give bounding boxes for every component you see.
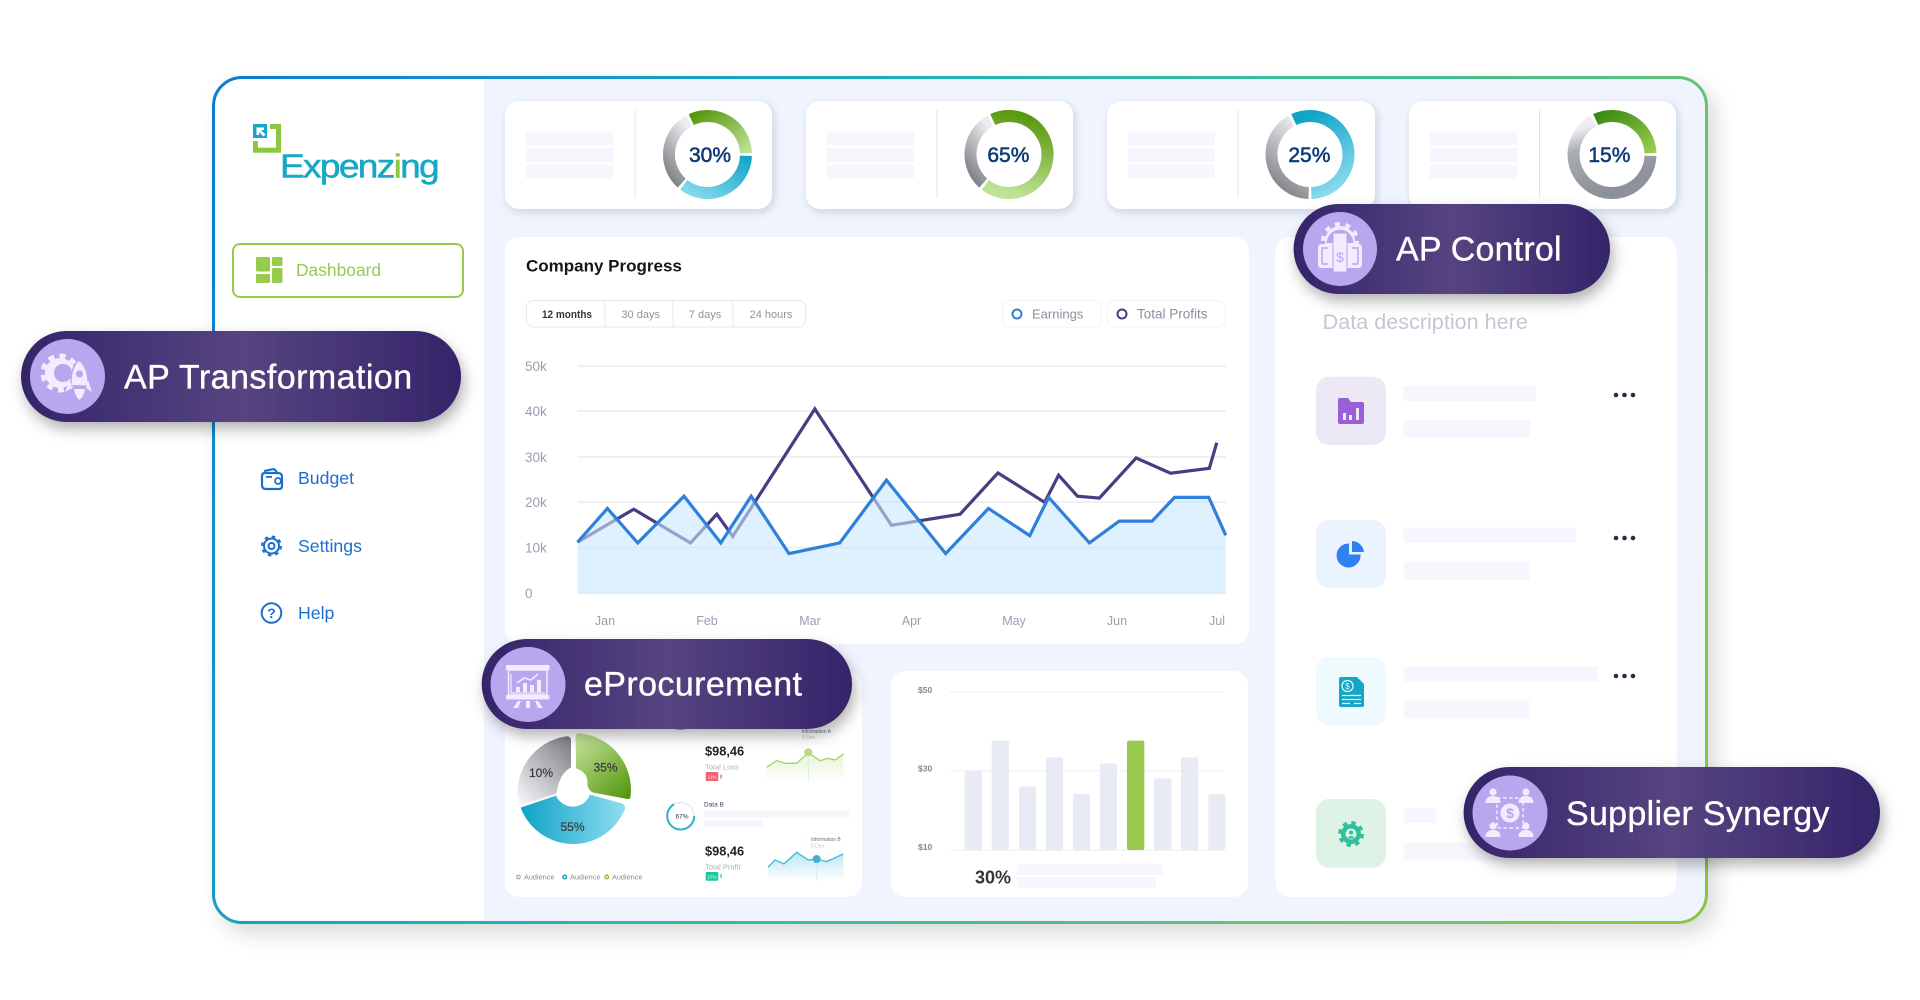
pill: Supplier Synergy: [1464, 767, 1880, 858]
x axis labels: Mar: [799, 614, 821, 628]
x axis labels: [595, 614, 1225, 628]
row 3: [1316, 657, 1635, 726]
icon: gear with user: [1340, 823, 1362, 845]
stat card: 15%: 15%: [1588, 144, 1630, 167]
legend: Total Profits: [1108, 300, 1225, 327]
icon: gear with money: [1318, 224, 1362, 272]
y axis labels: 10k: [525, 540, 547, 556]
nav item: Budget: [262, 468, 354, 489]
row 1: [1316, 377, 1635, 445]
y axis labels: $30: [918, 764, 932, 774]
metric: Total Loss: $98,46: [705, 744, 744, 758]
panel: audience pie and finance data: [505, 671, 862, 897]
heading: Company Progress: Company Progress: [526, 256, 682, 276]
sparkline: Information A: [767, 727, 843, 782]
y axis labels: 50k: [525, 359, 547, 374]
icon: suppliers network: $: [1506, 805, 1514, 821]
y axis labels: 40k: [525, 404, 547, 419]
y axis labels: $50: [918, 685, 932, 695]
y axis labels: 20k: [525, 495, 547, 510]
sparkline: Information B: Information B: [811, 837, 841, 843]
nav item: Help: ?: [267, 605, 276, 621]
metric: Total Profit: 27%: [707, 874, 717, 880]
icon: presentation board: [506, 665, 550, 708]
pie chart: 35%: [593, 760, 618, 774]
pie chart: 10%: [529, 766, 553, 780]
stat card: 25%: [1107, 101, 1375, 209]
y axis labels: [525, 359, 547, 601]
metric: Total Profit: [705, 844, 744, 881]
label: eProcurement: [584, 666, 802, 704]
progress ring: 67%: 67%: [675, 814, 689, 820]
metric: Total Profit: Total Profit: [705, 862, 741, 872]
time range tabs: 12 months: [542, 309, 592, 321]
icon: gear and rocket: [43, 356, 92, 400]
x axis labels: May: [1002, 614, 1027, 628]
stat card: 65%: [806, 101, 1073, 209]
label: Supplier Synergy: [1566, 795, 1830, 833]
nav button: Dashboard: [233, 244, 463, 297]
sparkline: Information A: Information A: [802, 729, 832, 735]
panel: Company Progress: [505, 237, 1249, 644]
legend: Total Profits: Total Profits: [1137, 306, 1208, 322]
x axis labels: Jun: [1107, 614, 1127, 628]
icon: suppliers network: [1486, 788, 1534, 837]
x axis labels: Apr: [902, 614, 921, 628]
label: AP Transformation: [124, 358, 413, 396]
donut: 65%: [971, 116, 1048, 193]
pie legend: Audience: [524, 873, 554, 882]
nav item: Help: [262, 603, 335, 623]
metric: Total Loss: Total Loss: [705, 762, 739, 772]
time range tabs: 7 days: [689, 309, 722, 321]
dashboard frame background: [212, 76, 1708, 924]
pie legend: Audience: [612, 873, 642, 882]
data block: Data B: [704, 802, 849, 827]
progress ring: 67%: [667, 802, 694, 830]
panel: data list: [1276, 237, 1676, 897]
pie chart: 55%: [560, 820, 585, 834]
icon: gear with money: $: [1336, 249, 1344, 265]
time range tabs: 24 hours: [750, 309, 793, 321]
pill: AP Control: [1294, 204, 1610, 294]
text: Data description here: Data description here: [1323, 309, 1528, 334]
row 4: [1316, 799, 1530, 868]
x axis labels: Jul: [1209, 614, 1225, 628]
stat card: 30%: [505, 101, 772, 209]
metric: Total Loss: [705, 744, 744, 781]
y axis labels: [918, 685, 932, 852]
y axis labels: $10: [918, 842, 932, 852]
x axis labels: Feb: [696, 614, 718, 628]
series: Total Profits: [578, 409, 1217, 543]
sparkline: Information B: 5 Dec: [811, 844, 825, 850]
sparkline: Information B: [768, 833, 843, 881]
pie chart: [518, 733, 631, 844]
metric: Total Loss: 11%: [708, 774, 716, 780]
label: AP Control: [1396, 230, 1562, 268]
icon: invoice document: [1339, 677, 1364, 707]
stat card: 25%: 25%: [1288, 144, 1330, 167]
y axis labels: 0: [525, 586, 533, 601]
time range tabs: [526, 300, 806, 327]
logo: Expenzing: Expenzing: [280, 149, 438, 185]
mini ring: hidden top: [667, 701, 695, 729]
frame border: [214, 78, 1706, 922]
nav item: Budget: Budget: [298, 468, 354, 488]
legend: Earnings: Earnings: [1032, 306, 1084, 322]
donut: 15%: [1574, 116, 1650, 193]
y axis labels: 30k: [525, 450, 547, 465]
line chart: [525, 359, 1226, 628]
pie legend: Audience: [570, 873, 600, 882]
sparkline: Information A: 5 Dec: [802, 735, 816, 741]
icon: pie chart: [1337, 541, 1364, 567]
pie legend: [517, 873, 642, 882]
series: Earnings: [578, 480, 1226, 593]
logo: Expenzing: [253, 124, 438, 185]
stat card: 15%: [1409, 101, 1676, 209]
nav item: Settings: Settings: [298, 536, 362, 556]
metric: Total Profit: $98,46: [705, 844, 744, 858]
pill: eProcurement: [482, 639, 852, 729]
icon: folder chart: [1338, 398, 1364, 424]
icon: invoice document: $: [1345, 682, 1350, 691]
donut: 30%: [669, 116, 746, 193]
pill: AP Transformation: [21, 331, 461, 422]
donut: 25%: [1271, 116, 1348, 193]
panel: bar chart: [891, 671, 1248, 897]
data block: Data B: Data B: [704, 802, 724, 808]
nav button: Dashboard: Dashboard: [296, 260, 381, 280]
legend: Earnings: [1002, 300, 1101, 327]
nav item: Settings: [262, 536, 362, 556]
bars: [965, 741, 1225, 850]
nav item: Help: Help: [298, 603, 335, 623]
x axis labels: Jan: [595, 614, 615, 628]
caption: 30%: 30%: [975, 868, 1011, 888]
caption: 30%: [975, 865, 1163, 888]
time range tabs: 30 days: [621, 309, 660, 321]
stat card: 65%: 65%: [987, 144, 1029, 167]
row 2: [1316, 520, 1635, 588]
sidebar: [233, 124, 463, 623]
stat card: 30%: 30%: [689, 144, 731, 167]
